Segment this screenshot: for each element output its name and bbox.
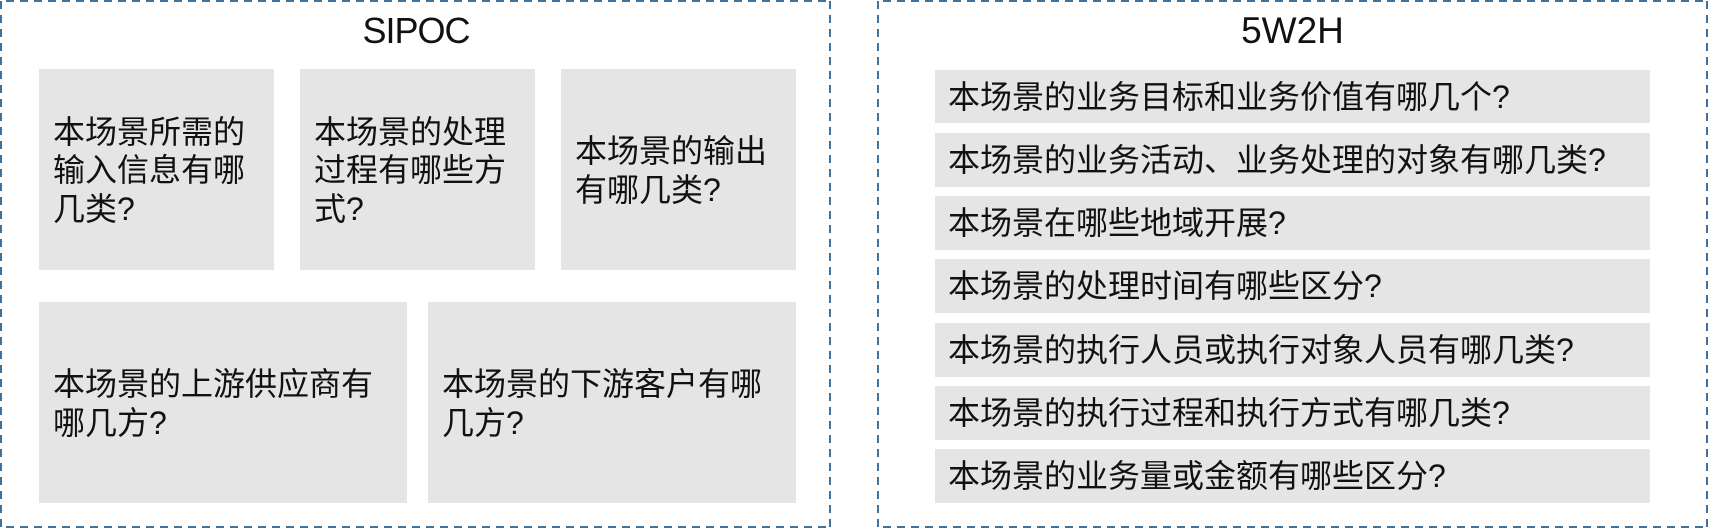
- row: how much: [935, 449, 1650, 503]
- card: input: [39, 69, 274, 270]
- row: who: 本场景的执行人员或执行对象人员有哪几类?: [948, 332, 1574, 368]
- card: output: 有哪几类?: [575, 172, 721, 208]
- row: where: 本场景在哪些地域开展?: [948, 205, 1286, 241]
- row: how: 本场景的执行过程和执行方式有哪几类?: [948, 395, 1510, 431]
- card: input: 本场景所需的: [53, 114, 245, 150]
- card: customer: [428, 302, 796, 503]
- card: output: [561, 69, 796, 270]
- card: process: 本场景的处理: [314, 114, 506, 150]
- row: when: 本场景的处理时间有哪些区分?: [948, 268, 1382, 304]
- row: how much: 本场景的业务量或金额有哪些区分?: [948, 458, 1446, 494]
- heading: 5W2H: 5W2H: [1241, 10, 1344, 51]
- panel: SIPOC: [39, 10, 796, 503]
- row: who: [935, 323, 1650, 377]
- row: how: [935, 386, 1650, 440]
- card: process: 过程有哪些方: [314, 152, 506, 188]
- row: what: 本场景的业务活动、业务处理的对象有哪几类?: [948, 142, 1606, 178]
- heading: SIPOC: SIPOC: [362, 10, 470, 51]
- card: supplier: [39, 302, 407, 503]
- card: customer: 几方?: [442, 404, 524, 440]
- card: supplier: 本场景的上游供应商有: [53, 366, 373, 402]
- card: input: 几类?: [53, 191, 135, 227]
- row: why: [935, 70, 1650, 123]
- card: process: [300, 69, 535, 270]
- card: output: 本场景的输出: [575, 133, 767, 169]
- card: customer: 本场景的下游客户有哪: [442, 366, 762, 402]
- card: supplier: 哪几方?: [53, 404, 167, 440]
- row: when: [935, 259, 1650, 313]
- card: process: 式?: [314, 191, 364, 227]
- row: where: [935, 196, 1650, 250]
- row: why: 本场景的业务目标和业务价值有哪几个?: [948, 78, 1510, 114]
- row: what: [935, 133, 1650, 187]
- card: input: 输入信息有哪: [53, 152, 245, 188]
